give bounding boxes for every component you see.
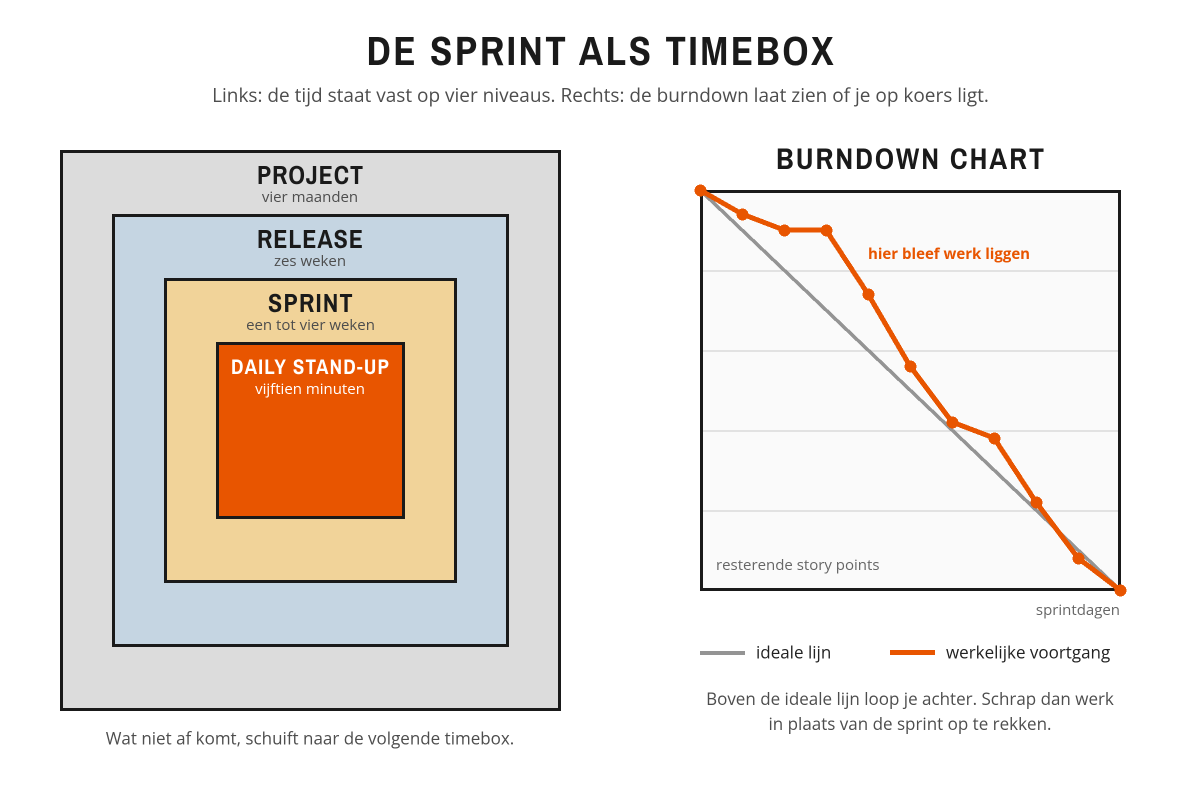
box: daily stand-up xyxy=(218,344,404,518)
box: release: RELEASE xyxy=(257,222,363,257)
actual progress line xyxy=(694,184,1126,596)
legend xyxy=(700,640,1110,664)
title: DE SPRINT ALS TIMEBOX xyxy=(366,23,834,78)
box: daily stand-up: DAILY STAND-UP xyxy=(231,352,389,381)
caption: left: Wat niet af komt, schuift naar de volgende timebox. xyxy=(106,726,514,750)
caption: right xyxy=(706,687,1114,735)
panel: nested timeboxes xyxy=(62,152,560,710)
box: release xyxy=(114,216,508,646)
subtitle: Links: de tijd staat vast op vier niveaus. Rechts: de burndown laat zien of je op koers ligt. xyxy=(212,82,989,108)
box: sprint: SPRINT xyxy=(268,286,352,321)
box: release: zes weken xyxy=(274,251,346,271)
legend: ideal xyxy=(700,640,831,664)
box: project: PROJECT xyxy=(257,158,363,193)
box: sprint xyxy=(166,280,456,582)
box: project: vier maanden xyxy=(262,187,358,207)
chart: burndown xyxy=(694,184,1126,620)
caption: right: in plaats van de sprint op te rekken. xyxy=(769,712,1051,735)
ideal line xyxy=(700,190,1120,590)
legend: actual: werkelijke voortgang xyxy=(946,640,1110,664)
heading: burndown chart: BURNDOWN CHART xyxy=(776,139,1044,179)
legend: ideal: ideale lijn xyxy=(756,640,831,664)
box: daily stand-up: vijftien minuten xyxy=(255,379,365,399)
box: project xyxy=(62,152,560,710)
x-axis label: sprintdagen xyxy=(1036,600,1120,620)
y-axis label: resterende story points xyxy=(716,555,879,575)
caption: right: Boven de ideale lijn loop je achter. Schrap dan werk xyxy=(706,687,1114,710)
annotation: hier bleef werk liggen xyxy=(868,244,1030,264)
box: sprint: een tot vier weken xyxy=(246,315,375,335)
